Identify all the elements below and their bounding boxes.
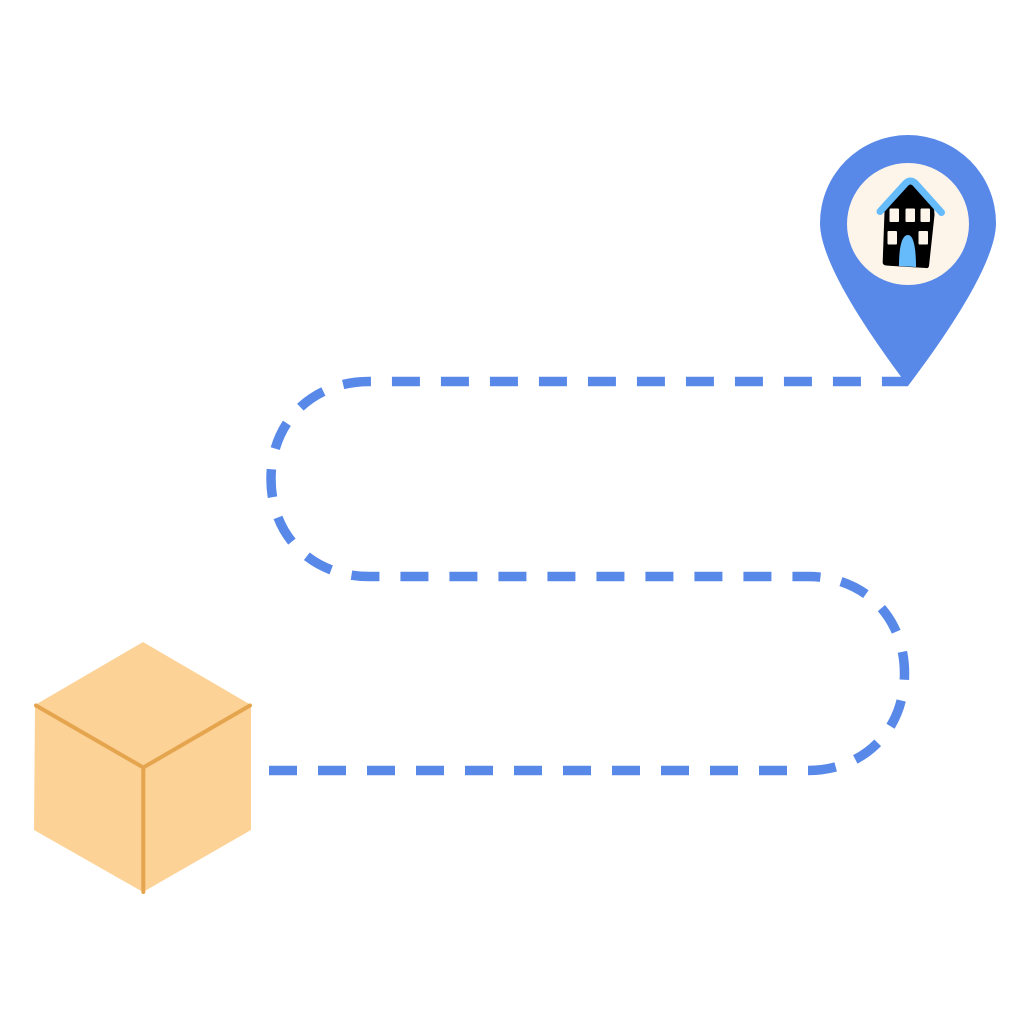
box edges [36, 706, 250, 892]
icon: location pin [820, 135, 996, 386]
dashed route path [269, 382, 908, 770]
box faces [34, 642, 251, 892]
house roof [880, 181, 942, 212]
pin body [820, 135, 996, 386]
house body [883, 183, 934, 268]
icon: parcel box [34, 642, 251, 892]
pin inner circle [847, 163, 969, 285]
house windows [888, 208, 930, 244]
icon: house [880, 181, 942, 268]
house door [899, 235, 916, 267]
